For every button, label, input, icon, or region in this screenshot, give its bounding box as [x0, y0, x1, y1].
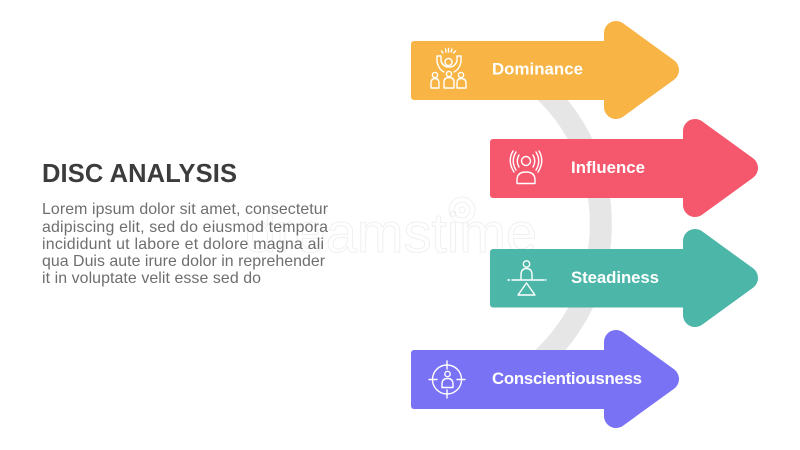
label: Dominance: Dominance	[492, 60, 583, 78]
arrow: Dominance	[411, 33, 667, 107]
central grey arc	[536, 88, 601, 364]
label: Influence: Influence	[571, 158, 645, 177]
description text block: it in voluptate velit esse sed do	[42, 270, 261, 287]
description text block: qua Duis aute irure dolor in reprehender	[42, 253, 326, 270]
arrow: Influence	[490, 131, 746, 205]
title: DISC ANALYSIS	[42, 160, 237, 188]
description text block: adipiscing elit, sed do eiusmod tempora	[42, 219, 328, 236]
label: Steadiness: Steadiness	[571, 268, 659, 287]
icon: person balancing	[508, 261, 546, 295]
arrow: Steadiness	[490, 241, 746, 315]
icon: target person	[429, 361, 465, 398]
description text block: Lorem ipsum dolor sit amet, consectetur	[42, 201, 329, 218]
icon: broadcasting person	[510, 151, 542, 184]
description text block	[42, 201, 329, 287]
description text block: incididunt ut labore et dolore magna ali	[42, 236, 324, 253]
icon: cheering crowd	[431, 48, 466, 88]
arrow: Conscientiousness	[411, 342, 667, 416]
label: Conscientiousness: Conscientiousness	[492, 369, 642, 388]
watermark: dreamstime	[245, 201, 537, 264]
